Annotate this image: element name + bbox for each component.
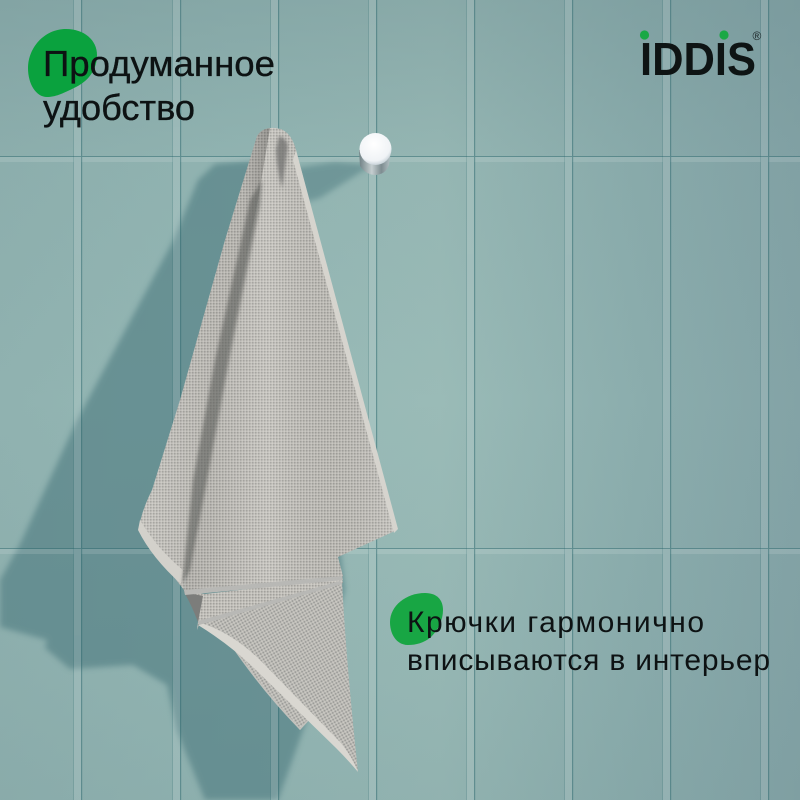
- heading: Продуманное удобство: [28, 29, 275, 128]
- towel right hem: [293, 150, 398, 533]
- towel left hem: [138, 520, 183, 584]
- towel fold shadow: [182, 180, 262, 585]
- towel front panel: [184, 128, 397, 594]
- towel cast shadow: [0, 160, 345, 800]
- logo wordmark: IDDIS: [640, 33, 756, 85]
- caption text: вписываются в интерьер: [407, 644, 770, 677]
- chrome wall hook: [359, 133, 392, 175]
- towel back tip: [228, 640, 312, 729]
- hanging towel: [138, 128, 398, 772]
- caption: Крючки гармонично вписываются в интерьер: [390, 593, 770, 677]
- registered mark: ®: [752, 29, 762, 43]
- logo green dots: [640, 30, 729, 40]
- hook cast shadow: [296, 162, 372, 202]
- heading text: Продуманное: [43, 43, 275, 84]
- towel hook crease: [276, 136, 288, 188]
- heading text: удобство: [43, 87, 195, 128]
- green blob accent: [28, 29, 97, 97]
- towel hem lower tip: [198, 622, 358, 772]
- green blob accent: [390, 593, 443, 645]
- towel middle fold: [184, 578, 343, 630]
- towel left fold: [139, 128, 278, 590]
- caption text: Крючки гармонично: [407, 606, 704, 639]
- towel bottom hems: [184, 576, 343, 595]
- logo: IDDIS: [640, 29, 762, 85]
- towel lower tip: [198, 581, 358, 772]
